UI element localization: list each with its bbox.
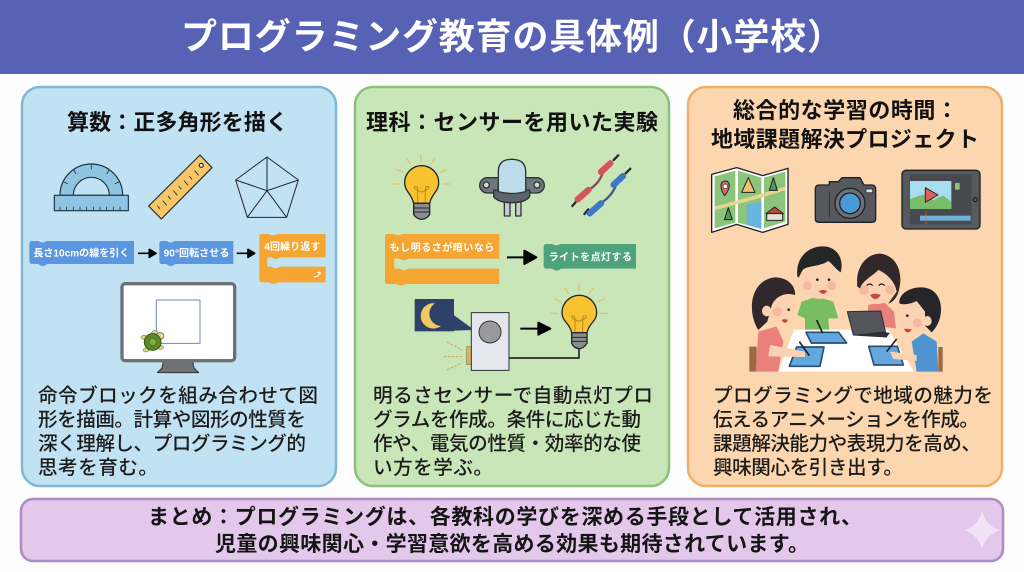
- girl at back right: [857, 254, 900, 328]
- icon: map: [712, 168, 788, 232]
- code block: draw line: 長さ10cmの線を引く: [33, 246, 129, 259]
- icon: lit bulb: [550, 283, 608, 349]
- styluses: [799, 320, 897, 356]
- panel: math: [22, 87, 336, 486]
- boy at right: [890, 287, 941, 372]
- icon: ruler: [149, 155, 212, 219]
- panel: integrated study: [688, 87, 1002, 486]
- body text: science: 作や、電気の性質・効率的な使: [373, 433, 641, 455]
- icon: tablet video editor: [902, 170, 980, 229]
- integrated study illustrations: [712, 168, 980, 372]
- code block: turn on light: ライトを点灯する: [549, 251, 632, 264]
- arrow: [507, 251, 536, 264]
- math illustrations: [29, 155, 326, 373]
- heading: integrated study: [711, 98, 979, 152]
- arrow: [520, 323, 550, 335]
- tablets: [789, 332, 903, 366]
- code block: if dark: もし明るさが暗いなら: [390, 241, 494, 254]
- icon: turtle: [141, 331, 164, 352]
- body text: math: 形を描画。計算や図形の性質を: [38, 409, 306, 431]
- body text: science: 明るさセンサーで自動点灯プロ: [373, 385, 653, 407]
- boy in green: [797, 246, 842, 332]
- science illustrations: [385, 154, 636, 370]
- summary text: まとめ：プログラミングは、各教科の学びを深める手段として活用され、: [148, 505, 862, 529]
- title banner: [0, 0, 1024, 74]
- heading: math: 算数：正多角形を描く: [67, 110, 288, 135]
- girl at left: [749, 277, 943, 372]
- body text: integrated study: 課題解決能力や表現力を高め、: [713, 433, 981, 455]
- laptop: [847, 311, 890, 337]
- summary text: 児童の興味関心・学習意欲を高める効果も期待されています。: [215, 533, 809, 556]
- icon: jumper wires: [572, 155, 630, 214]
- summary text: [148, 505, 862, 556]
- body text: integrated study: 伝えるアニメーションを作成。: [713, 409, 979, 431]
- body text: science: グラムを作成。条件に応じた動: [373, 409, 641, 431]
- code block: rotate: 90°回転させる: [164, 246, 229, 259]
- code block: repeat: 4回繰り返す: [264, 240, 320, 253]
- code block: turn on light: [544, 244, 636, 271]
- arrow: [138, 249, 156, 257]
- icon: sparkle: [964, 511, 1000, 549]
- illustration: children working together: [749, 246, 943, 372]
- body text: math: 思考を育む。: [38, 457, 158, 479]
- body text: integrated study: プログラミングで地域の魅力を: [713, 385, 993, 407]
- icon: camera: [815, 178, 876, 222]
- panel: science: [355, 87, 669, 486]
- code block: repeat: [259, 234, 326, 284]
- icon: pentagon: [236, 157, 298, 217]
- code block: draw line: [29, 241, 134, 266]
- body text: integrated study: [713, 385, 993, 479]
- heading: integrated study: 地域課題解決プロジェクト: [711, 127, 979, 152]
- icon: sensor device: [444, 313, 579, 370]
- body text: math: [38, 384, 318, 479]
- body text: integrated study: 興味関心を引き出す。: [713, 457, 903, 479]
- arrow: [237, 249, 255, 257]
- title banner: プログラミング教育の具体例（小学校）: [181, 16, 843, 57]
- table: [778, 330, 914, 372]
- icon: night moon: [415, 299, 474, 331]
- icon: light bulb: [392, 154, 450, 219]
- icon: protractor: [54, 164, 128, 211]
- body text: science: い方を学ぶ。: [373, 457, 493, 479]
- code block: if dark: [385, 234, 499, 286]
- code block: rotate: [159, 241, 233, 266]
- summary panel: [21, 499, 1003, 561]
- heading: science: 理科：センサーを用いた実験: [366, 110, 658, 135]
- body text: math: 深く理解し、プログラミング的: [38, 433, 306, 455]
- icon: light sensor: [480, 159, 544, 216]
- body text: science: [373, 385, 653, 479]
- icon: monitor with turtle: [122, 284, 235, 373]
- heading: integrated study: 総合的な学習の時間：: [733, 98, 958, 123]
- body text: math: 命令ブロックを組み合わせて図: [38, 384, 318, 407]
